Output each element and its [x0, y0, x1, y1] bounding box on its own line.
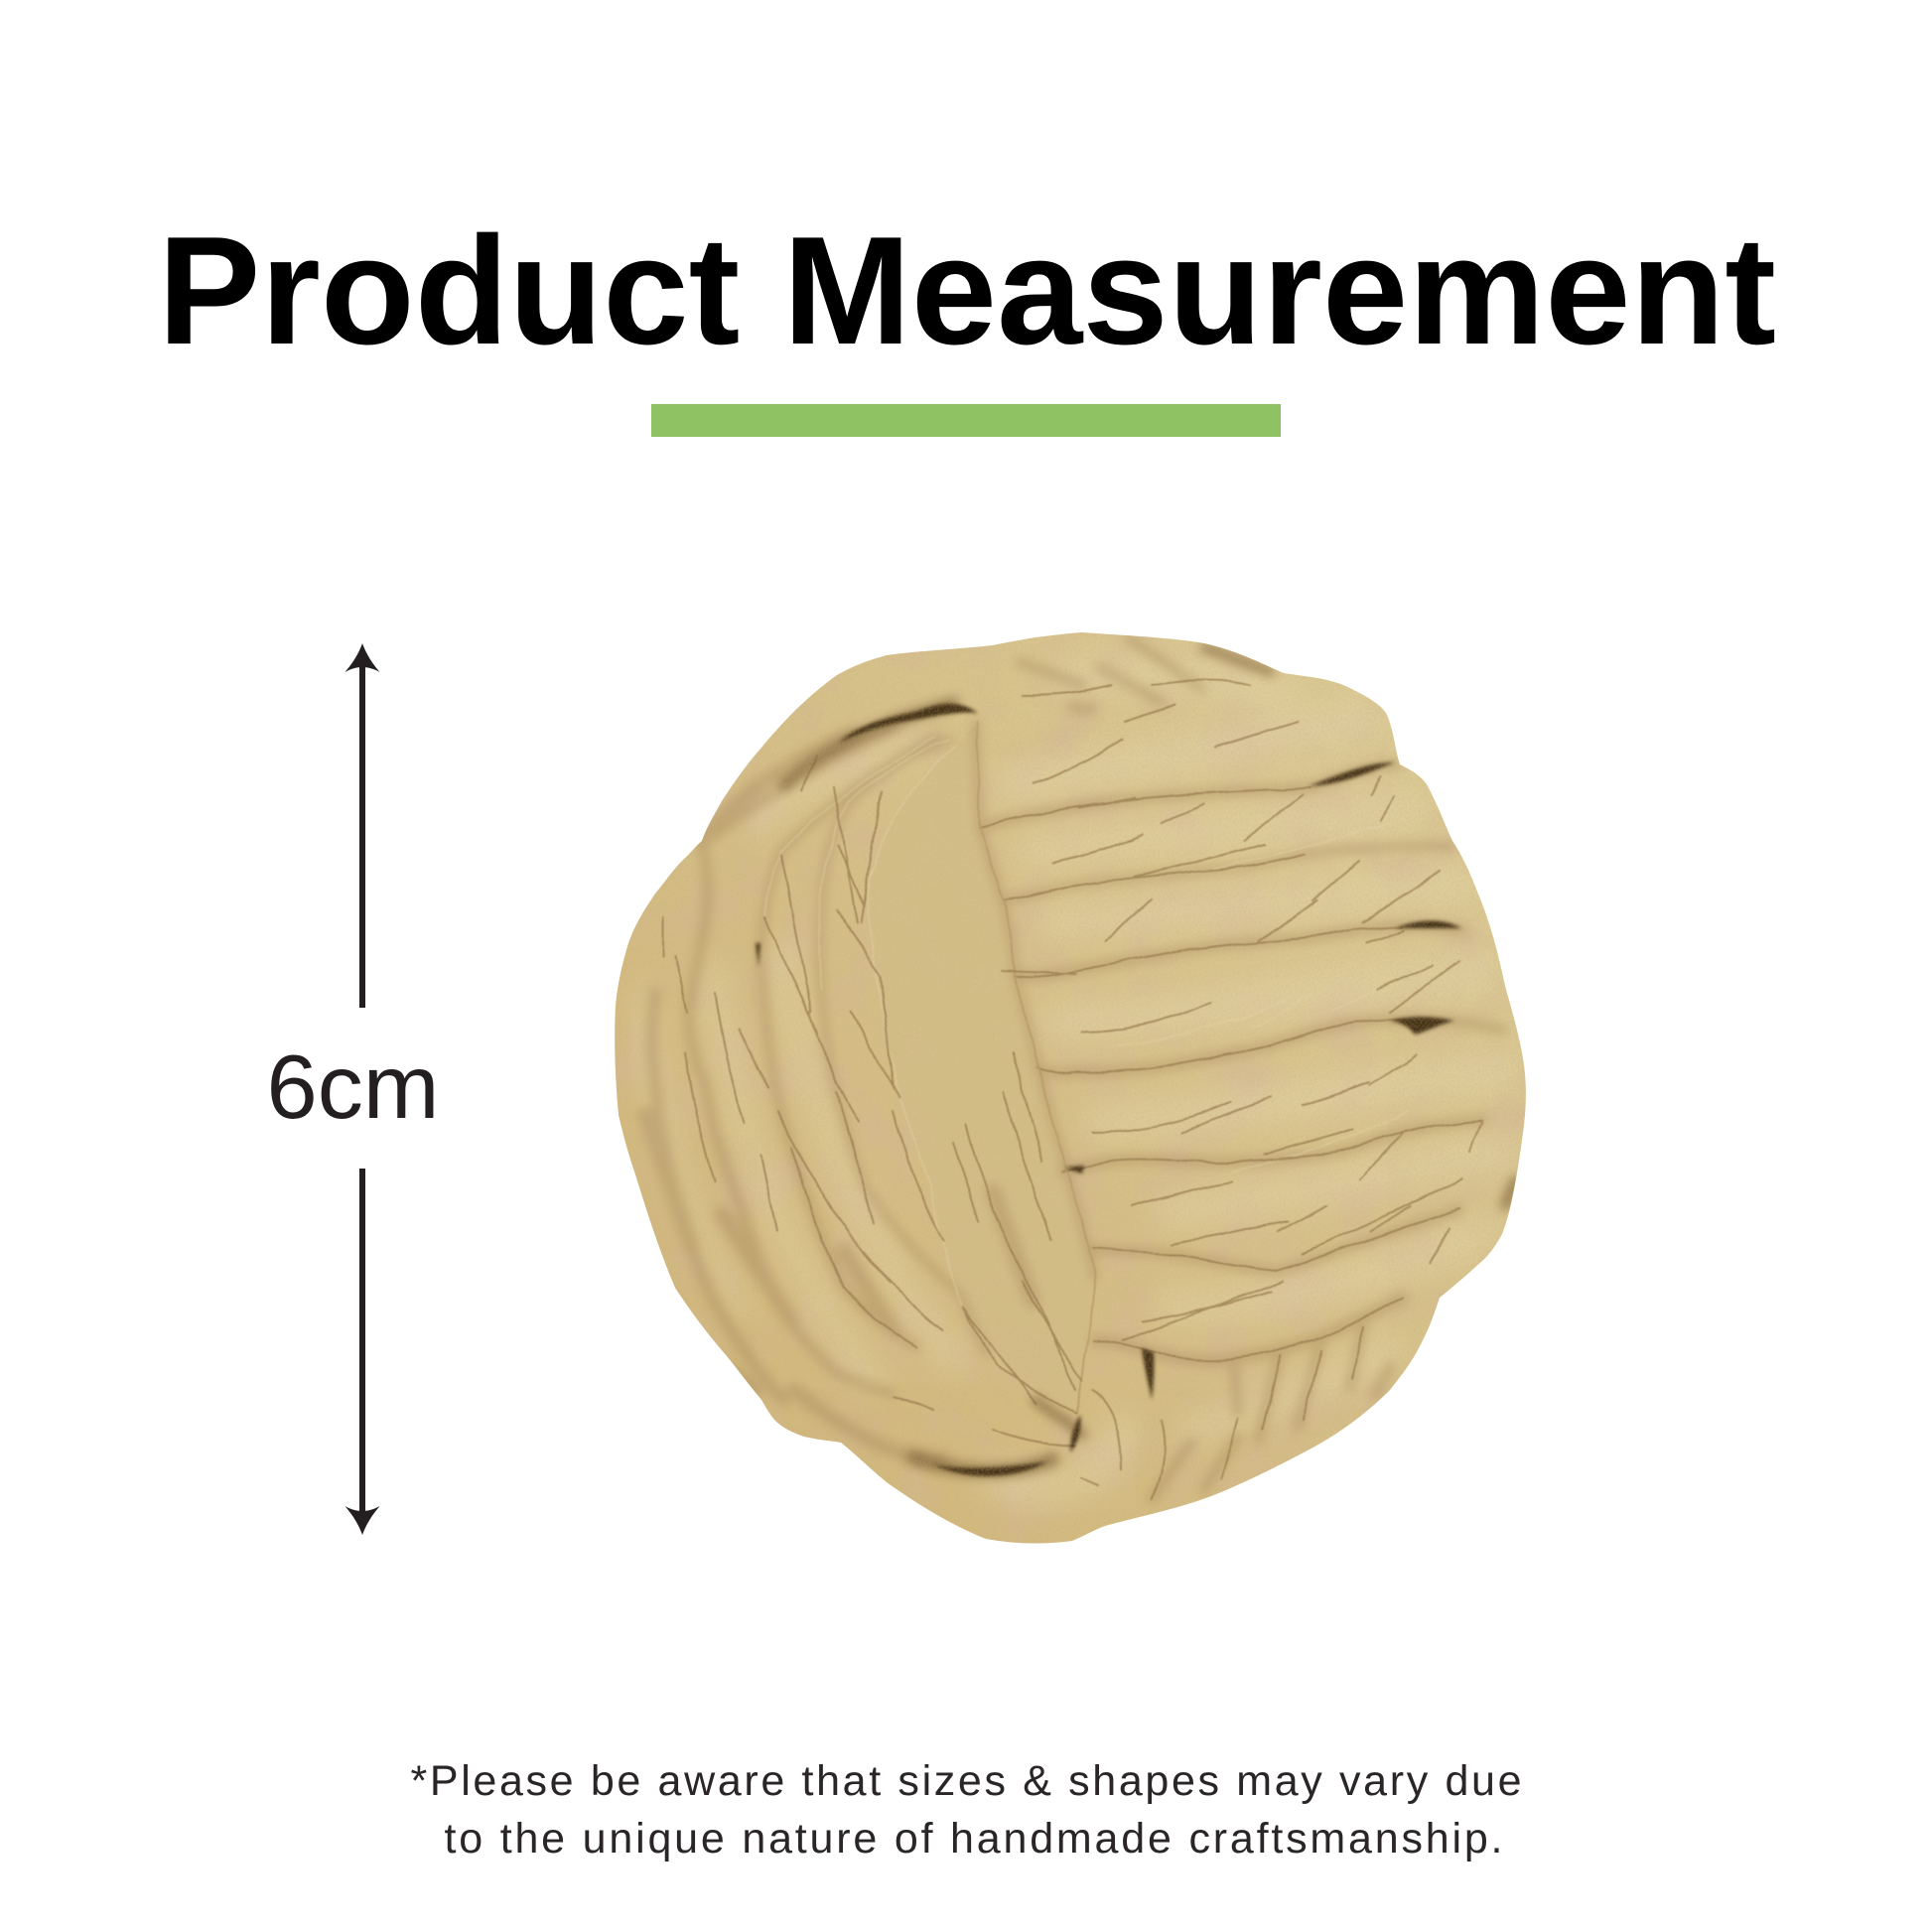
footnote line 1: *Please be aware that sizes & shapes may vary due	[411, 1757, 1521, 1805]
dimension label: 6cm	[266, 1037, 439, 1138]
title: Product Measurement	[158, 205, 1776, 376]
soft shading beside strand edges	[645, 638, 1502, 1499]
front leaf strand	[961, 833, 972, 850]
ball base colour	[596, 616, 1549, 1559]
broad colour mottling	[616, 651, 1525, 1533]
left strand creases	[662, 758, 900, 1099]
footnote disclaimer	[411, 1757, 1521, 1863]
thin creases	[662, 680, 1482, 1499]
pale paper edges	[764, 738, 1430, 1308]
strand boundary lines	[980, 787, 1311, 827]
dark gaps between strands	[756, 647, 1516, 1476]
paper grain texture	[687, 640, 1475, 1477]
right band creases	[1079, 705, 1459, 1085]
arrow: downward	[345, 1169, 379, 1535]
height dimension: 6cm	[266, 643, 439, 1535]
highlights along strand centres	[645, 675, 1499, 1488]
product illustration: kraft paper knot ball	[596, 616, 1549, 1559]
footnote line 2: to the unique nature of handmade craftsmanship.	[445, 1815, 1503, 1863]
arrow: upward	[345, 643, 379, 1008]
green accent bar under title	[651, 404, 1281, 437]
